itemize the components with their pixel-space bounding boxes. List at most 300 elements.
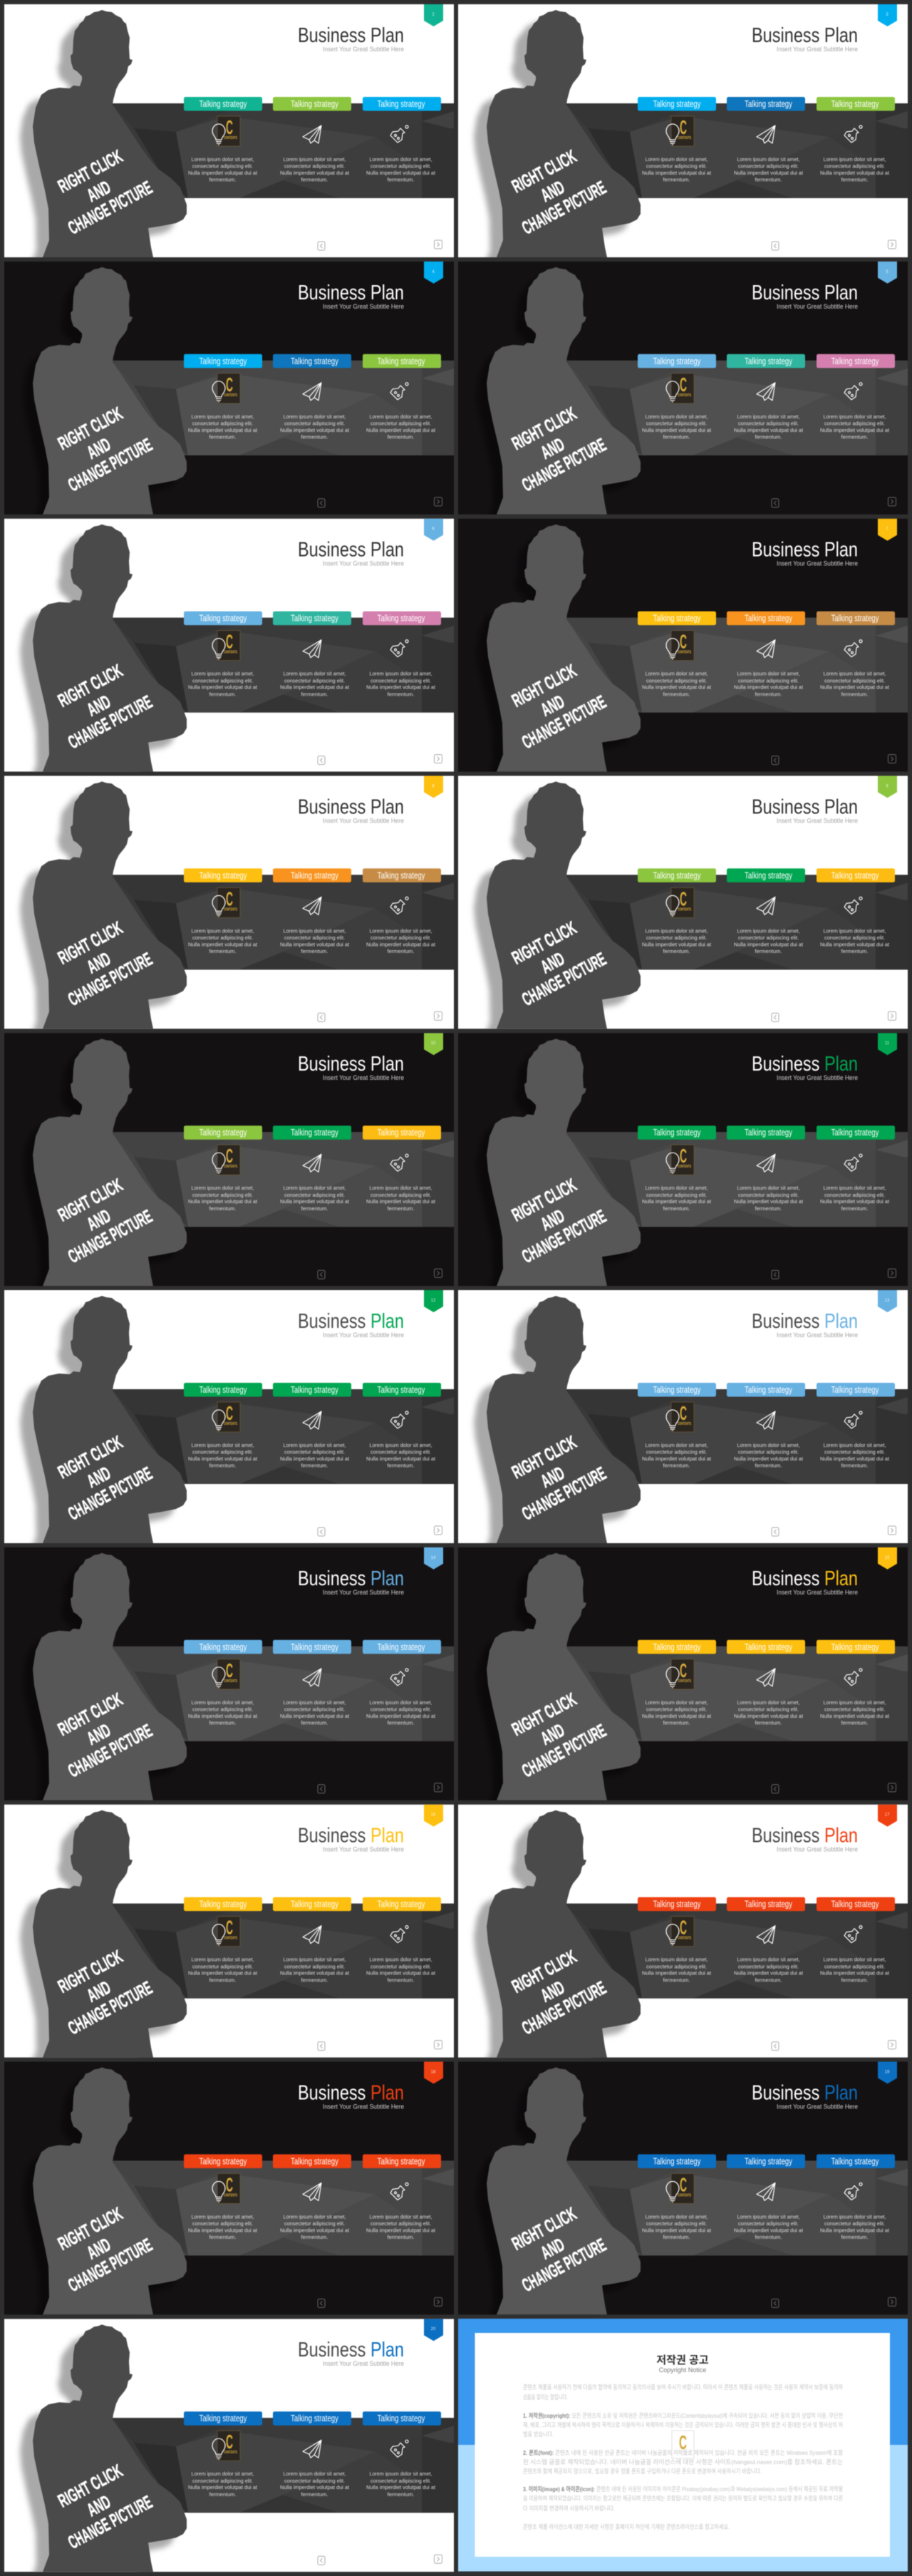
text column 2: Lorem ipsum dolor sit amet, [284, 1699, 346, 1706]
panel: copyright notice [458, 2319, 908, 2572]
icon: flask [390, 1926, 408, 1943]
icon: bulb and logo: CONTENTS [678, 1165, 691, 1169]
text column 2: Nulla imperdiet volutpat dui at [734, 427, 803, 433]
title: Business Plan [752, 2081, 858, 2104]
tab 2: Talking strategy [291, 98, 338, 109]
placeholder caption [56, 148, 154, 234]
text column 2: consectetur adipiscing elit. [738, 1449, 799, 1456]
tab 1: Talking strategy [653, 870, 701, 880]
text column 3: Nulla imperdiet volutpat dui at [366, 2227, 435, 2233]
tab 3 [817, 1125, 895, 1140]
text column 1: Nulla imperdiet volutpat dui at [188, 1456, 257, 1462]
text column 2: fermentum. [755, 948, 782, 954]
tab 1: Talking strategy [653, 613, 701, 624]
placeholder caption: AND [537, 1462, 568, 1492]
placeholder caption: RIGHT CLICK [54, 145, 126, 197]
icon: bulb and logo [666, 373, 694, 403]
slide background [4, 519, 454, 772]
text column 2: consectetur adipiscing elit. [738, 420, 799, 426]
placeholder caption: AND [537, 1977, 568, 2006]
tab 3: Talking strategy [831, 356, 879, 366]
text column 1: consectetur adipiscing elit. [192, 934, 253, 941]
page badge: 12 [431, 1299, 436, 1303]
text column 2: consectetur adipiscing elit. [738, 163, 799, 170]
text column 3: consectetur adipiscing elit. [370, 1449, 431, 1456]
text column 3: Lorem ipsum dolor sit amet, [824, 413, 886, 420]
icon: paper plane [303, 897, 321, 915]
text column 1: fermentum. [209, 2234, 237, 2240]
text column 1: Nulla imperdiet volutpat dui at [188, 941, 257, 947]
page badge: 19 [885, 2070, 890, 2074]
placeholder caption: RIGHT CLICK [54, 1431, 126, 1483]
icon: previous arrow [772, 499, 779, 508]
tab 2 [727, 1383, 805, 1397]
subtitle: Insert Your Great Subtitle Here [777, 1331, 858, 1339]
text column 3: Lorem ipsum dolor sit amet, [369, 671, 432, 677]
text column 1: consectetur adipiscing elit. [192, 1449, 253, 1456]
icon: bulb and logo: C [226, 631, 233, 653]
title: Business Plan [752, 1310, 858, 1333]
text column 2: consectetur adipiscing elit. [738, 934, 799, 941]
title: Business Plan [298, 1825, 404, 1848]
icon: previous arrow [772, 1013, 779, 1021]
text column 2: Lorem ipsum dolor sit amet, [737, 1442, 799, 1448]
tab 1: Talking strategy [653, 1899, 701, 1910]
tab 1: Talking strategy [200, 613, 247, 624]
tab 1 [638, 1897, 716, 1911]
text column 1: Nulla imperdiet volutpat dui at [642, 1970, 711, 1977]
tab 3: Talking strategy [378, 870, 425, 880]
text column 1: consectetur adipiscing elit. [192, 163, 253, 170]
page badge [424, 1805, 443, 1827]
polygon band [565, 1132, 908, 1227]
placeholder caption: RIGHT CLICK [508, 1945, 580, 1997]
placeholder caption: CHANGE PICTURE [519, 1977, 610, 2039]
tab 1: Talking strategy [200, 1899, 247, 1910]
slide background [458, 4, 908, 257]
slide background [4, 1033, 454, 1286]
placeholder caption [508, 1689, 610, 1781]
silhouette placeholder [477, 1553, 641, 1809]
icon: paper plane [303, 2183, 321, 2200]
text column 1: Lorem ipsum dolor sit amet, [646, 156, 708, 163]
text column 1 [188, 156, 257, 183]
placeholder caption: RIGHT CLICK [54, 917, 126, 969]
icon: bulb and logo: C [680, 1917, 687, 1939]
section 1 copyright [523, 2412, 843, 2438]
text column 3: Lorem ipsum dolor sit amet, [369, 2471, 432, 2477]
text column 3: fermentum. [388, 691, 415, 697]
icon: next arrow [888, 1526, 896, 1535]
tab 2 [727, 1897, 805, 1911]
panel: slide 8 [4, 776, 454, 1039]
subtitle: Insert Your Great Subtitle Here [777, 46, 858, 53]
section 3 image and icon: 을 이용하여 제작되었습니다. 이미지는 참고로만 제공되며 콘텐츠에는 포함됩니다. 이에 따른 권리는 원저자 별도로 확인하고 필요할 경우 수정을 위하여 다른 [523, 2495, 843, 2502]
subtitle: Insert Your Great Subtitle Here [323, 303, 404, 310]
text column 3: Nulla imperdiet volutpat dui at [366, 2484, 435, 2490]
icon: previous arrow [318, 1270, 325, 1279]
icon: paper plane [303, 125, 321, 143]
slide background [4, 776, 454, 1029]
silhouette placeholder [20, 1296, 187, 1553]
text column 2: Nulla imperdiet volutpat dui at [280, 684, 349, 691]
title: Business Plan [752, 1053, 858, 1076]
text column 1: fermentum. [209, 948, 237, 954]
text column 3: Lorem ipsum dolor sit amet, [824, 1185, 886, 1191]
placeholder caption: AND [83, 2490, 114, 2520]
text column 3 [820, 156, 889, 183]
icon: flask [844, 640, 862, 657]
polygon band [565, 875, 908, 969]
tab 1 [638, 1383, 716, 1397]
text column 3: Lorem ipsum dolor sit amet, [824, 1442, 886, 1448]
placeholder caption: RIGHT CLICK [508, 917, 580, 969]
panel: slide 17 [458, 1805, 908, 2068]
placeholder caption: CHANGE PICTURE [65, 1205, 156, 1267]
text column 3: fermentum. [841, 1977, 868, 1983]
text column 2: fermentum. [301, 2491, 328, 2498]
text column 3: Nulla imperdiet volutpat dui at [366, 1713, 435, 1719]
slide background [458, 1547, 908, 1800]
tab 3 [817, 97, 895, 111]
text column 3 [820, 1442, 889, 1469]
text column 3: Nulla imperdiet volutpat dui at [820, 427, 889, 433]
subtitle: Insert Your Great Subtitle Here [777, 1074, 858, 1081]
text column 1 [188, 1699, 257, 1726]
icon: next arrow [435, 1011, 442, 1020]
icon: bulb and logo [212, 1402, 240, 1432]
tab 2: Talking strategy [745, 1642, 792, 1652]
text column 2 [734, 2213, 803, 2240]
text column 3: fermentum. [841, 1720, 868, 1726]
text column 1: fermentum. [663, 1720, 690, 1726]
icon: bulb and logo: C [680, 2173, 687, 2195]
text column 3: consectetur adipiscing elit. [824, 1449, 885, 1456]
icon: bulb and logo [212, 631, 240, 661]
page badge [424, 2061, 443, 2083]
text column 1: consectetur adipiscing elit. [646, 2220, 707, 2227]
icon: bulb and logo [212, 116, 240, 146]
placeholder caption: RIGHT CLICK [54, 1174, 126, 1226]
title: Business Plan [298, 795, 404, 818]
text column 3 [366, 413, 435, 441]
placeholder caption: CHANGE PICTURE [519, 1719, 610, 1781]
icon: bulb and logo: CONTENTS [678, 1679, 691, 1684]
polygon band [111, 2160, 454, 2255]
slide background [4, 1290, 454, 1543]
text column 3: Nulla imperdiet volutpat dui at [820, 2227, 889, 2233]
icon: flask [844, 2183, 862, 2200]
icon: flask [844, 1154, 862, 1171]
placeholder caption [510, 148, 608, 234]
icon: next arrow [435, 1269, 442, 1277]
text column 2 [280, 927, 349, 954]
panel: slide 4 [4, 262, 454, 523]
polygon band [565, 1389, 908, 1484]
polygon band [565, 1647, 908, 1741]
polygon band [565, 2160, 908, 2255]
tab 1: Talking strategy [653, 2155, 701, 2166]
text column 2: fermentum. [755, 691, 782, 697]
text column 1 [188, 671, 257, 697]
subtitle: Insert Your Great Subtitle Here [323, 1846, 404, 1853]
icon: bulb and logo: C [680, 631, 687, 653]
text column 1 [642, 1185, 711, 1212]
text column 3: Nulla imperdiet volutpat dui at [820, 684, 889, 691]
text column 1: fermentum. [663, 433, 690, 440]
tab 3 [363, 1125, 441, 1140]
text column 3: fermentum. [841, 177, 868, 183]
slide background [458, 1290, 908, 1543]
tab 2: Talking strategy [291, 1127, 338, 1138]
panel: slide 13 [458, 1290, 908, 1553]
tab 2: Talking strategy [745, 870, 792, 880]
subtitle: Insert Your Great Subtitle Here [777, 1589, 858, 1596]
slide background [458, 262, 908, 515]
tab 2: Talking strategy [745, 1384, 792, 1395]
subtitle: Insert Your Great Subtitle Here [323, 1074, 404, 1081]
silhouette placeholder [23, 2067, 187, 2323]
subtitle: Insert Your Great Subtitle Here [323, 560, 404, 567]
tab 2 [273, 1897, 351, 1911]
text column 3: consectetur adipiscing elit. [824, 677, 885, 684]
silhouette placeholder [477, 267, 641, 523]
panel: slide 15 [458, 1547, 908, 1809]
icon: paper plane [303, 1154, 321, 1172]
text column 1: fermentum. [663, 1205, 690, 1212]
icon: next arrow [435, 2041, 442, 2049]
text column 1: consectetur adipiscing elit. [646, 420, 707, 426]
text column 3 [820, 1185, 889, 1212]
icon: paper plane [303, 1411, 321, 1429]
page badge [878, 1805, 897, 1827]
placeholder caption: RIGHT CLICK [508, 1431, 580, 1483]
text column 3: fermentum. [388, 177, 415, 183]
text column 1: Lorem ipsum dolor sit amet, [191, 927, 254, 934]
icon: bulb and logo: CONTENTS [224, 907, 237, 912]
text column 3: consectetur adipiscing elit. [370, 1706, 431, 1713]
polygon band [565, 618, 908, 713]
text column 1: fermentum. [209, 433, 237, 440]
text column 3: Nulla imperdiet volutpat dui at [366, 427, 435, 433]
placeholder caption: CHANGE PICTURE [519, 177, 610, 239]
text column 2 [280, 156, 349, 183]
text column 3: fermentum. [841, 1205, 868, 1212]
page badge [424, 4, 443, 26]
text column 1: fermentum. [663, 2234, 690, 2240]
icon: previous arrow [318, 1785, 325, 1793]
icon: flask [390, 1669, 408, 1686]
placeholder caption: CHANGE PICTURE [519, 948, 610, 1010]
page badge: 16 [431, 1813, 436, 1818]
text column 2: Lorem ipsum dolor sit amet, [737, 1185, 799, 1191]
placeholder caption: RIGHT CLICK [54, 403, 126, 454]
tab 1 [184, 612, 262, 625]
icon: bulb and logo: C [680, 373, 687, 396]
text column 2: consectetur adipiscing elit. [284, 1449, 345, 1456]
tab 2: Talking strategy [291, 2155, 338, 2166]
text column 1: Lorem ipsum dolor sit amet, [191, 1442, 254, 1448]
tab 1 [638, 2154, 716, 2168]
polygon band [565, 103, 908, 198]
text column 3: Lorem ipsum dolor sit amet, [824, 2213, 886, 2220]
icon: bulb and logo: CONTENTS [678, 907, 691, 912]
icon: next arrow [435, 2297, 442, 2306]
text column 3: consectetur adipiscing elit. [370, 934, 431, 941]
text column 2: fermentum. [301, 691, 328, 697]
title: Business Plan [752, 24, 858, 47]
icon: bulb and logo: CONTENTS [224, 1165, 237, 1169]
text column 3: Nulla imperdiet volutpat dui at [820, 1970, 889, 1977]
text column 2: fermentum. [301, 1720, 328, 1726]
icon: bulb and logo [666, 887, 694, 917]
slide background [458, 1033, 908, 1286]
page badge [424, 776, 443, 798]
text column 3: Nulla imperdiet volutpat dui at [366, 1456, 435, 1462]
text column 2 [280, 413, 349, 441]
placeholder caption: CHANGE PICTURE [65, 177, 156, 239]
text column 3: fermentum. [841, 948, 868, 954]
icon: bulb and logo [666, 2173, 694, 2203]
tab 1 [184, 2411, 262, 2426]
text column 2: fermentum. [301, 1463, 328, 1469]
page badge [424, 1547, 443, 1570]
tab 2: Talking strategy [291, 870, 338, 880]
text column 2: Nulla imperdiet volutpat dui at [280, 1970, 349, 1977]
text column 2: consectetur adipiscing elit. [284, 934, 345, 941]
text column 2: Nulla imperdiet volutpat dui at [280, 2484, 349, 2490]
text column 1: consectetur adipiscing elit. [646, 1449, 707, 1456]
slide background [4, 262, 454, 515]
placeholder caption: CHANGE PICTURE [65, 2491, 156, 2553]
icon: bulb and logo: C [680, 1659, 687, 1681]
placeholder caption: AND [83, 1462, 114, 1492]
tab 1 [638, 612, 716, 625]
polygon band [111, 1389, 454, 1484]
tab 2 [727, 1125, 805, 1140]
icon: bulb and logo: C [226, 2173, 233, 2195]
subtitle: Insert Your Great Subtitle Here [323, 46, 404, 53]
placeholder caption: RIGHT CLICK [508, 1174, 580, 1226]
text column 3: Lorem ipsum dolor sit amet, [369, 156, 432, 163]
icon: bulb and logo: CONTENTS [678, 136, 691, 140]
icon: bulb and logo [666, 1145, 694, 1175]
text column 3: Lorem ipsum dolor sit amet, [369, 1185, 432, 1191]
tab 3: Talking strategy [831, 1642, 879, 1652]
icon: paper plane [757, 383, 775, 401]
text column 1: Lorem ipsum dolor sit amet, [191, 671, 254, 677]
icon: bulb and logo: C [226, 2431, 233, 2453]
text column 1: Nulla imperdiet volutpat dui at [188, 1970, 257, 1977]
icon: previous arrow [318, 1527, 325, 1536]
text column 3 [366, 1699, 435, 1726]
icon: bulb and logo: CONTENTS [224, 1937, 237, 1941]
icon: previous arrow [318, 499, 325, 508]
tab 2 [273, 1383, 351, 1397]
text column 3 [820, 1699, 889, 1726]
tab 2 [273, 97, 351, 111]
placeholder caption: AND [537, 2234, 568, 2264]
icon: paper plane [303, 2440, 321, 2458]
placeholder caption: RIGHT CLICK [54, 1945, 126, 1997]
placeholder caption [54, 659, 156, 753]
tab 3: Talking strategy [831, 98, 879, 109]
icon: next arrow [888, 1783, 896, 1792]
text column 2: fermentum. [301, 1205, 328, 1212]
panel: slide 2 [4, 4, 454, 267]
text column 1: Nulla imperdiet volutpat dui at [188, 2227, 257, 2233]
text column 3 [366, 1957, 435, 1983]
text column 3: consectetur adipiscing elit. [370, 2220, 431, 2227]
text column 3: Lorem ipsum dolor sit amet, [369, 413, 432, 420]
subtitle: Insert Your Great Subtitle Here [323, 2360, 404, 2367]
text column 3: consectetur adipiscing elit. [370, 1963, 431, 1969]
icon: next arrow [888, 1269, 896, 1277]
text column 3 [366, 671, 435, 697]
text column 1: consectetur adipiscing elit. [646, 1706, 707, 1713]
text column 2: Lorem ipsum dolor sit amet, [284, 1957, 346, 1963]
icon: bulb and logo: C [226, 1402, 233, 1424]
placeholder caption: CHANGE PICTURE [65, 433, 156, 495]
tab 2: Talking strategy [291, 356, 338, 366]
panel: slide 14 [4, 1547, 454, 1809]
text column 2: consectetur adipiscing elit. [284, 1192, 345, 1198]
silhouette placeholder [23, 267, 187, 523]
text column 2: Nulla imperdiet volutpat dui at [734, 1456, 803, 1462]
text column 2 [734, 927, 803, 954]
icon: flask [390, 897, 408, 914]
placeholder caption [508, 1431, 610, 1525]
text column 2 [734, 1699, 803, 1726]
text column 2: Lorem ipsum dolor sit amet, [737, 927, 799, 934]
icon: bulb and logo: C [680, 1402, 687, 1424]
tab 1 [638, 868, 716, 882]
tab 3: Talking strategy [378, 98, 425, 109]
text column 3: Nulla imperdiet volutpat dui at [366, 1970, 435, 1977]
subtitle: Insert Your Great Subtitle Here [777, 817, 858, 824]
placeholder caption: CHANGE PICTURE [519, 1463, 610, 1525]
text column 3: Nulla imperdiet volutpat dui at [820, 170, 889, 176]
icon: paper plane [303, 383, 321, 401]
icon: bulb and logo: C [680, 1145, 687, 1167]
page badge: 8 [432, 784, 435, 788]
panel: slide 20 [4, 2319, 454, 2576]
page badge [424, 519, 443, 541]
silhouette placeholder [474, 781, 641, 1039]
slide background [458, 2061, 908, 2314]
text column 3: fermentum. [841, 691, 868, 697]
icon: paper plane [757, 1411, 775, 1429]
tab 2: Talking strategy [745, 613, 792, 624]
tab 1: Talking strategy [200, 1127, 247, 1138]
text column 1: Nulla imperdiet volutpat dui at [642, 1198, 711, 1205]
text column 3: Nulla imperdiet volutpat dui at [820, 941, 889, 947]
text column 2: Lorem ipsum dolor sit amet, [737, 671, 799, 677]
text column 1 [188, 1442, 257, 1469]
polygon band [111, 361, 454, 455]
placeholder caption [508, 403, 610, 495]
placeholder caption: CHANGE PICTURE [65, 948, 156, 1010]
placeholder caption: RIGHT CLICK [54, 659, 126, 711]
text column 3: consectetur adipiscing elit. [824, 1192, 885, 1198]
tab 3: Talking strategy [831, 1127, 879, 1138]
slide background [4, 2319, 454, 2572]
tab 2 [727, 612, 805, 625]
page badge [878, 4, 897, 26]
polygon band [111, 1132, 454, 1227]
text column 3: consectetur adipiscing elit. [824, 1706, 885, 1713]
icon: flask [844, 1669, 862, 1686]
